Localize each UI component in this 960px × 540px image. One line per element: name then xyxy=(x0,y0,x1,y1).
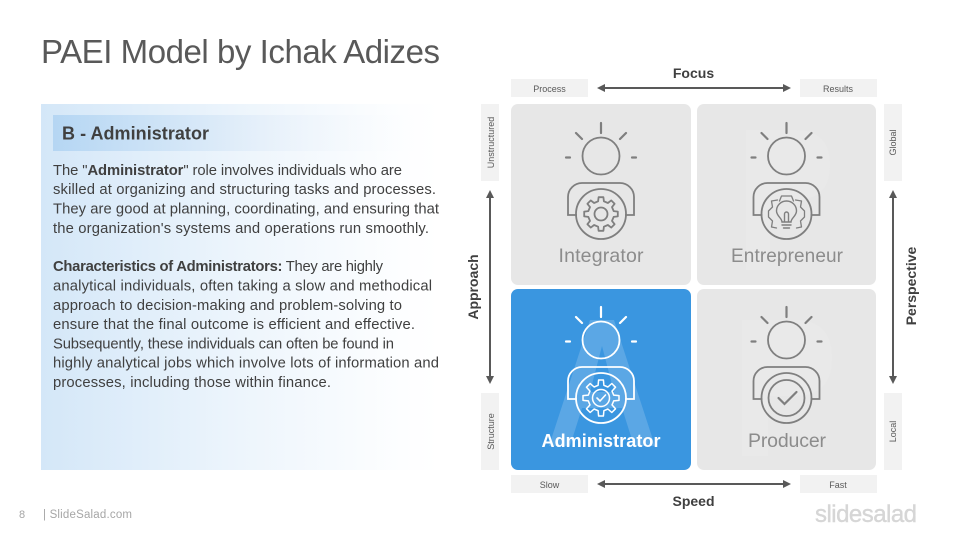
axis: Speed: Slow xyxy=(540,480,560,490)
label: Entrepreneur: Entrepreneur xyxy=(731,246,844,267)
icon: person with lightbulb gear xyxy=(752,123,822,239)
decorative letter P xyxy=(742,320,832,456)
axis: Approach: Approach xyxy=(465,254,481,320)
title: PAEI Model by Ichak Adizes xyxy=(41,33,440,70)
axis: Approach: Unstructured xyxy=(486,117,496,168)
axis: Perspective: Perspective xyxy=(903,246,919,325)
axis: Perspective xyxy=(884,104,919,470)
text block: role description: The "Administrator" role involves individuals who are xyxy=(53,163,402,179)
axis: Speed: Speed xyxy=(672,493,715,509)
panel: Integrator xyxy=(511,104,691,285)
label: Administrator: Administrator xyxy=(542,431,660,451)
text block: role description xyxy=(53,163,439,237)
axis: Focus xyxy=(511,65,877,97)
icon: person with check badge xyxy=(752,307,822,423)
icon: person with check gear xyxy=(566,307,636,423)
logo: slidesalad: slidesalad xyxy=(815,501,917,528)
axis: Perspective: Local xyxy=(888,421,898,442)
axis: Approach xyxy=(465,104,499,470)
axis: Approach: Structure xyxy=(486,413,496,450)
text block: role description: skilled at organizing and structuring tasks and processes. xyxy=(53,182,436,198)
axis: Speed: Fast xyxy=(829,480,847,490)
text block: characteristics: ensure that the final outcome is efficient and effective. xyxy=(53,317,415,333)
axis: Speed xyxy=(511,475,877,509)
axis: Focus: Process xyxy=(533,84,566,94)
panel: Entrepreneur xyxy=(697,104,876,285)
text block: characteristics: processes, including those within finance. xyxy=(53,375,331,391)
decorative letter A xyxy=(549,320,655,446)
text block: role description: the organization's systems and operations run smoothly. xyxy=(53,221,429,237)
axis: Focus: Focus xyxy=(673,65,714,81)
axis: Perspective: Global xyxy=(888,129,898,156)
panel: Administrator xyxy=(511,289,691,470)
text block: characteristics: approach to decision-making and problem-solving to xyxy=(53,298,402,314)
heading: B - Administrator xyxy=(53,115,433,151)
text block: characteristics: Subsequently, these individuals can often be found in xyxy=(53,336,394,352)
text block: characteristics: highly analytical jobs which involve lots of information and xyxy=(53,356,439,372)
text block: role description: They are good at planning, coordinating, and ensuring that xyxy=(53,202,439,218)
text block: characteristics: analytical individuals, often taking a slow and methodical xyxy=(53,278,432,294)
text block: characteristics: Characteristics of Administrators: They are highly xyxy=(53,259,384,275)
label: Integrator: Integrator xyxy=(558,245,644,267)
text block: characteristics xyxy=(53,259,439,391)
decorative letter P xyxy=(746,130,830,270)
heading: B - Administrator: B - Administrator xyxy=(62,124,209,144)
label: Producer: Producer xyxy=(748,430,826,452)
axis: Focus: Results xyxy=(823,84,854,94)
panel: administrator description xyxy=(41,104,441,470)
icon: person with gear xyxy=(566,123,636,239)
footer: source: | SlideSalad.com xyxy=(43,509,132,521)
footer: page number: 8 xyxy=(19,509,25,521)
panel: Producer xyxy=(697,289,876,470)
